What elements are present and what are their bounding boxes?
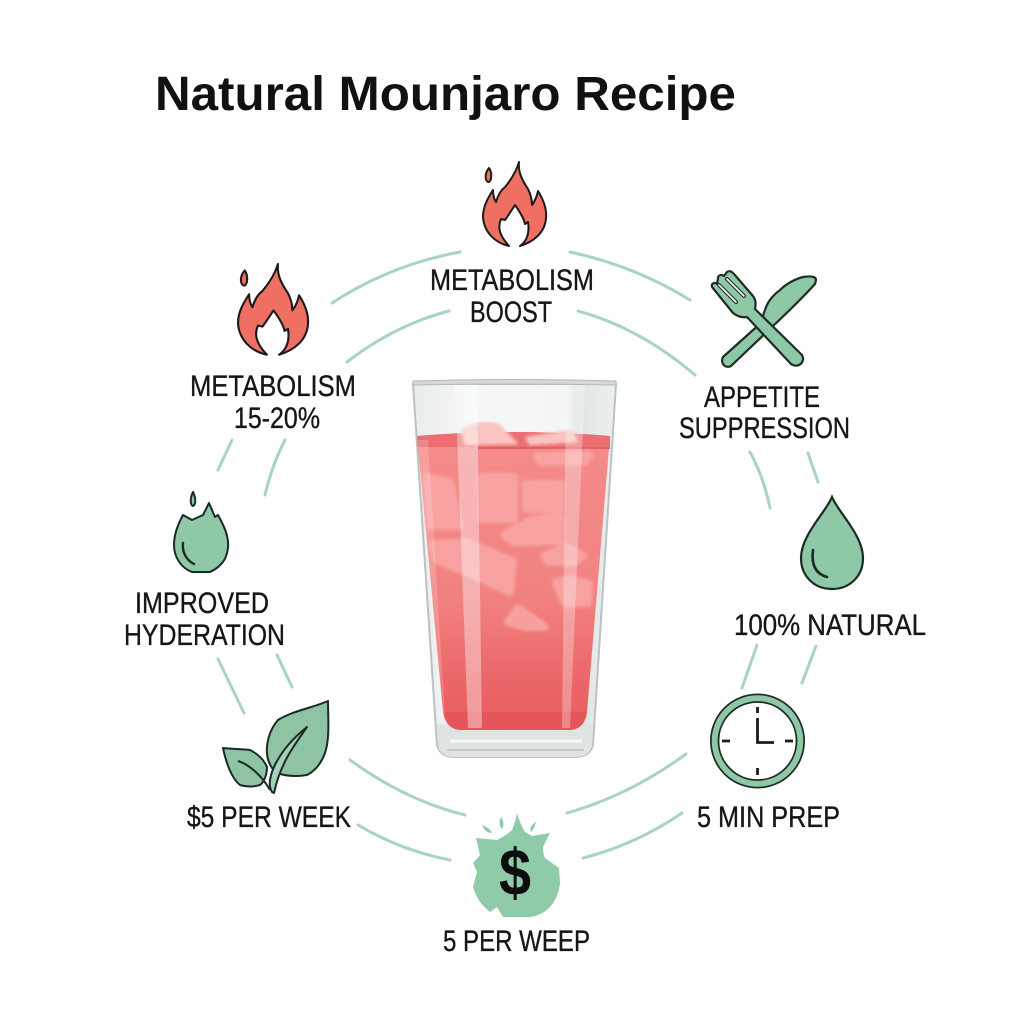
icon: fork and knife xyxy=(712,271,816,367)
title: Natural Mounjaro Recipe xyxy=(155,68,736,121)
icon: dollar splash xyxy=(473,813,560,917)
label: APPETITE xyxy=(704,381,820,414)
glass body xyxy=(413,384,616,757)
item: metabolism 15-20% xyxy=(190,264,356,435)
icon: cracked water drop xyxy=(174,492,228,572)
label: IMPROVED xyxy=(135,587,269,620)
item: metabolism 15-20%: 15-20% xyxy=(234,402,320,435)
base of glass xyxy=(437,724,593,757)
rim xyxy=(413,380,616,385)
red drink xyxy=(417,432,610,730)
item: $5 per week xyxy=(187,701,351,834)
label: 5 MIN PREP xyxy=(697,801,840,834)
icon: water drop xyxy=(801,497,863,589)
item: 100% natural xyxy=(734,497,926,642)
icon: clock xyxy=(711,694,804,788)
label: 100% NATURAL xyxy=(734,609,926,642)
item: improved hydration xyxy=(124,492,285,652)
icon: leaf xyxy=(223,701,328,793)
item: appetite suppression: SUPPRESSION xyxy=(679,412,850,445)
label: 5 PER WEEP xyxy=(443,925,590,958)
label: $5 PER WEEK xyxy=(187,801,351,834)
icon: dollar splash: $ xyxy=(499,835,531,909)
label: METABOLISM xyxy=(430,264,594,297)
item: improved hydration: HYDERATION xyxy=(124,619,285,652)
ice cubes xyxy=(427,455,589,627)
ice above surface xyxy=(462,423,576,444)
item: 5 per weep (bottom) xyxy=(443,813,590,958)
circular dashed ring arcs xyxy=(218,252,818,860)
label: METABOLISM xyxy=(190,370,356,403)
item: appetite suppression xyxy=(679,271,850,445)
item: metabolism boost (top) xyxy=(430,162,594,329)
item: 5 min prep xyxy=(697,694,840,834)
drink glass illustration xyxy=(413,380,616,757)
item: metabolism boost (top): BOOST xyxy=(470,296,552,329)
icon: flame xyxy=(238,264,308,355)
icon: flame xyxy=(483,162,546,246)
glass highlights xyxy=(455,384,482,728)
